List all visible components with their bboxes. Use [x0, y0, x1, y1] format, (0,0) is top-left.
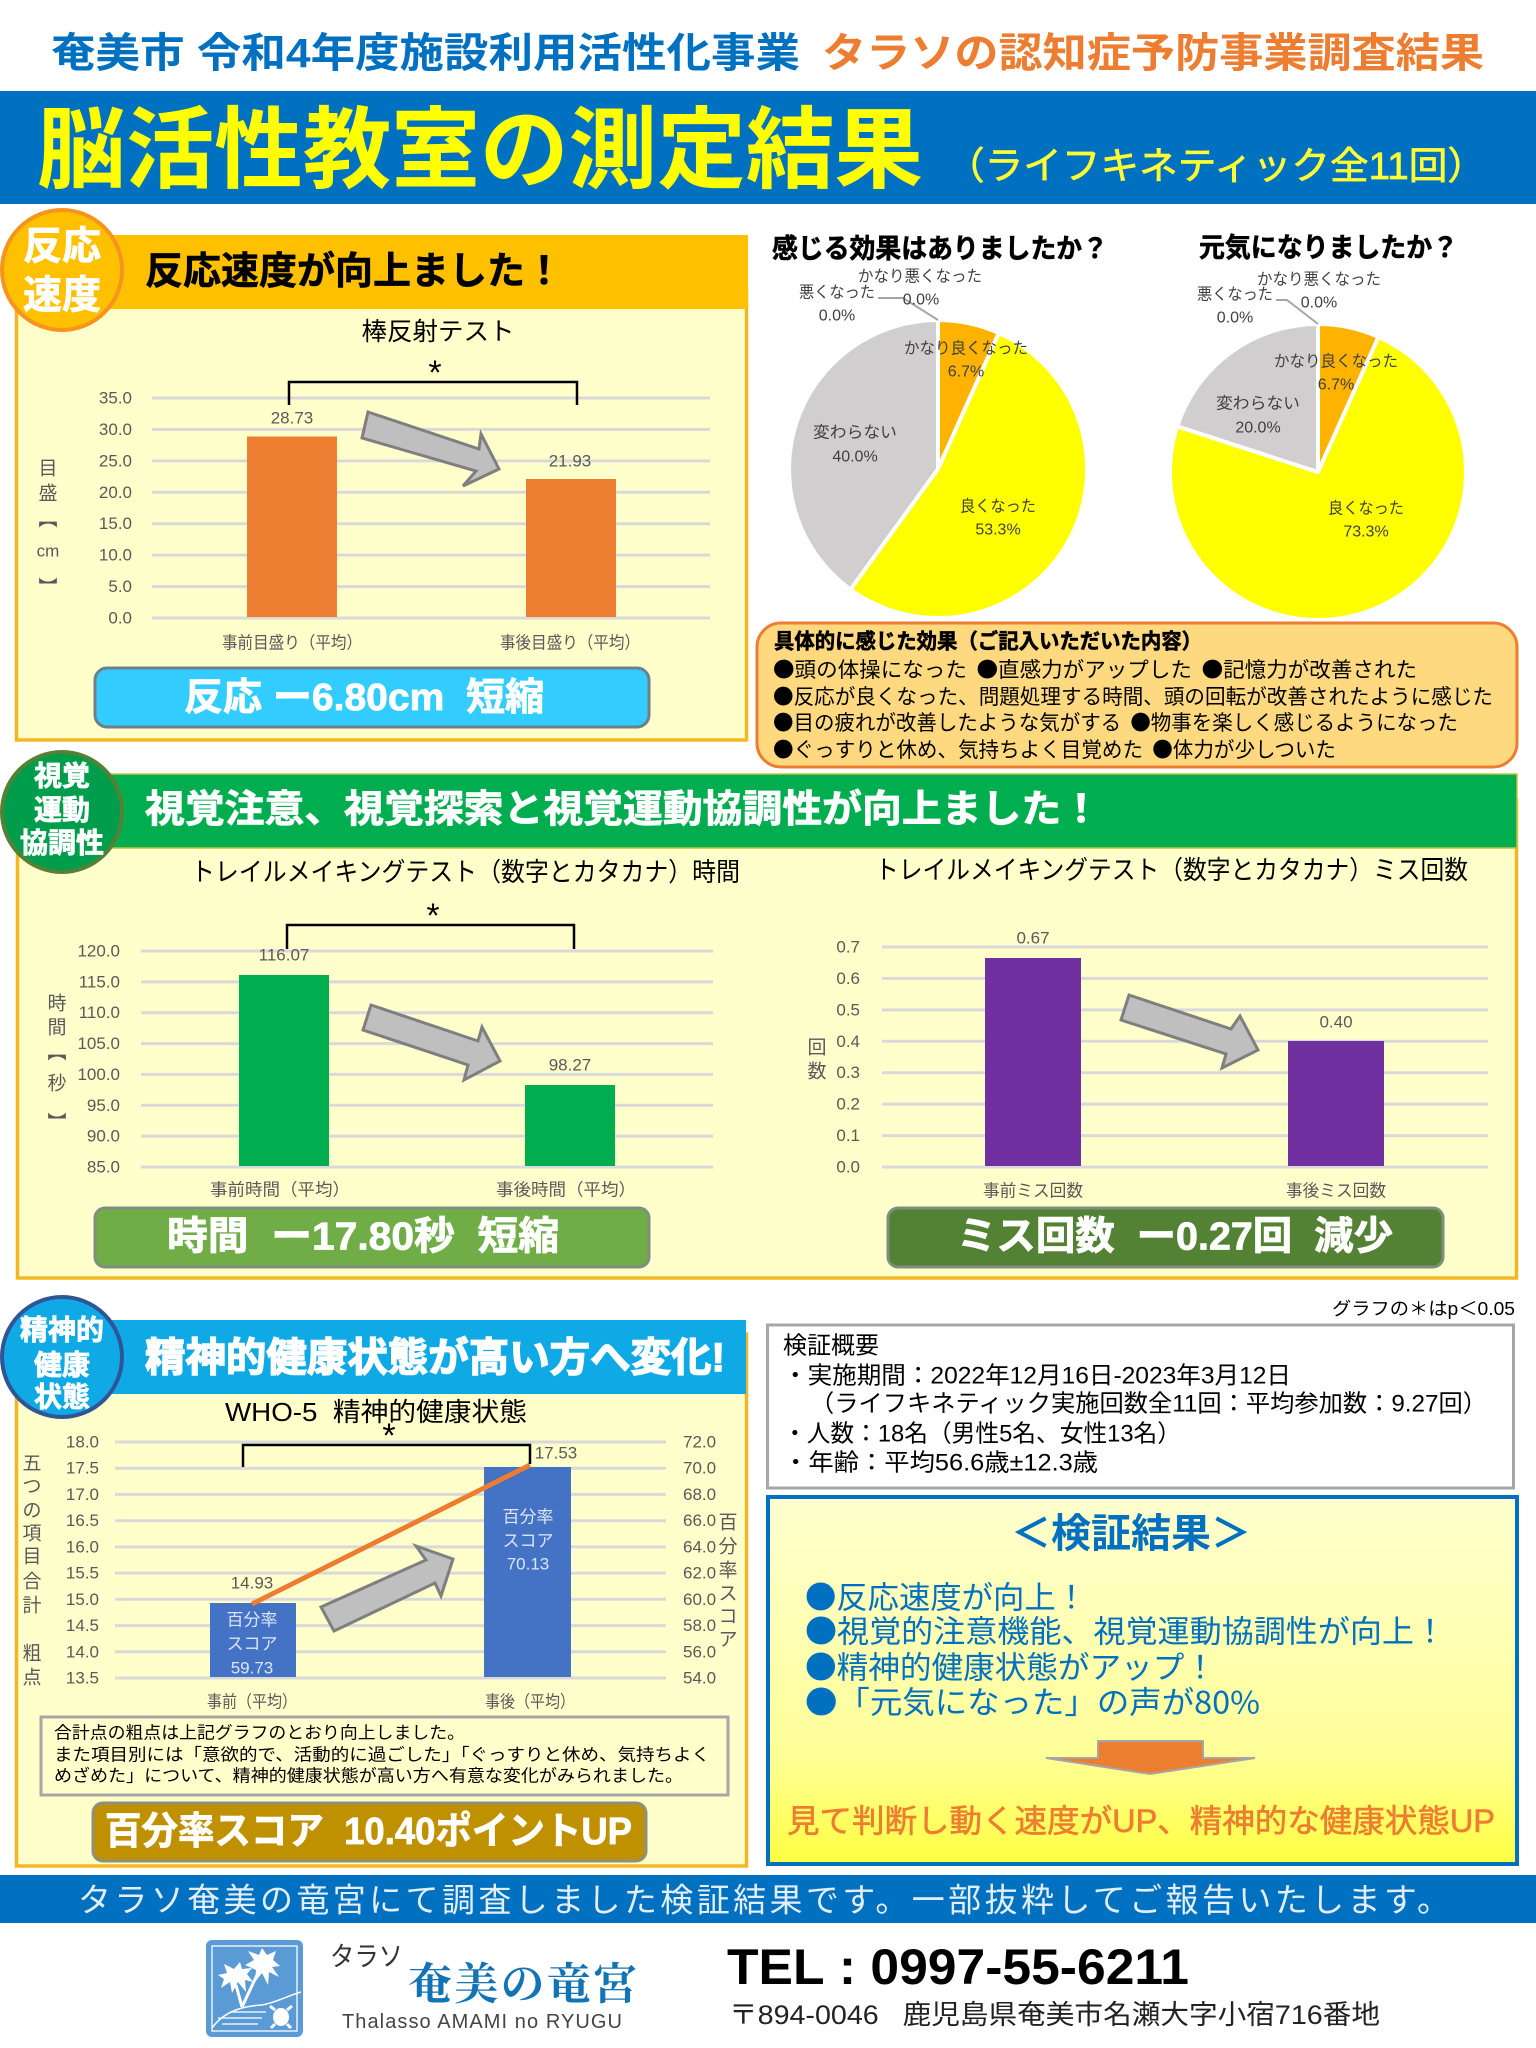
bar chart: stick reflex: 25.0: [99, 451, 132, 470]
bar chart: trail making errors: 0.3: [836, 1063, 860, 1082]
chart title: trail making time: トレイルメイキングテスト（数字とカタカナ）時間: [191, 857, 740, 887]
bar chart: stick reflex: 事後目盛り（平均）: [500, 634, 640, 652]
badge: visuomotor: [2, 752, 122, 872]
bar chart: trail making errors: 0.67: [1016, 928, 1050, 948]
conclusion text: 見て判断し動く速度がUP、精神的な健康状態UP: [787, 1803, 1495, 1839]
pie labels: energy: 0.0%: [1301, 294, 1337, 312]
combo chart: WHO-5: ア: [718, 1630, 738, 1650]
bar chart: stick reflex: 盛: [38, 482, 58, 504]
arrow: error decrease: [1121, 995, 1258, 1068]
combo chart: WHO-5: 15.0: [66, 1590, 99, 1609]
combo chart: WHO-5: 目: [22, 1546, 42, 1568]
pie labels: felt effect: 悪くなった: [799, 284, 875, 302]
badge: reaction speed: 速度: [23, 274, 101, 318]
pie chart: felt effect: [789, 320, 1087, 618]
combo chart: WHO-5: 13.5: [66, 1668, 99, 1688]
pie labels: energy: 0.0%: [1217, 310, 1253, 326]
pie labels: felt effect: 良くなった: [960, 498, 1036, 516]
combo chart: WHO-5: 66.0: [683, 1511, 716, 1530]
bar chart: trail making errors: [807, 928, 1488, 1200]
pie labels: felt effect: 0.0%: [819, 308, 855, 324]
bar chart: trail making time: 120.0: [77, 942, 120, 960]
combo chart: WHO-5: 百分率: [502, 1508, 554, 1526]
combo chart: WHO-5: 14.93: [231, 1574, 273, 1592]
pie labels: energy: 6.7%: [1318, 376, 1354, 394]
bar chart: stick reflex: 15.0: [99, 514, 132, 533]
bar chart: trail making time: ︻: [47, 1042, 67, 1064]
pie labels: felt effect: かなり悪くなった: [858, 268, 982, 286]
arrow: conclusion: [1046, 1741, 1255, 1774]
top heading: 奄美市 令和4年度施設利用活性化事業: [51, 30, 800, 76]
bar chart: trail making time: 98.27: [549, 1056, 591, 1074]
arrow: decrease: [362, 412, 499, 486]
panel: study overview: （ライフキネティック実施回数全11回：平均参加数：9.27回）: [810, 1390, 1487, 1418]
title banner: [0, 91, 1536, 204]
panel: study overview: [768, 1325, 1514, 1488]
combo chart: WHO-5: 五: [22, 1454, 42, 1474]
pie labels: energy: 20.0%: [1235, 420, 1281, 436]
combo chart: WHO-5: 16.5: [66, 1511, 99, 1530]
result list: ●「元気になった」の声が80%: [805, 1678, 1260, 1722]
pie labels: felt effect: [799, 268, 1036, 538]
combo chart: WHO-5: 56.0: [683, 1642, 716, 1661]
badge: visuomotor: 視覚: [34, 760, 90, 792]
bar chart: trail making time: 116.07: [259, 946, 309, 964]
panel: study overview: ・年齢：平均56.6歳±12.3歳: [783, 1450, 1098, 1476]
bar chart: trail making errors: 0.1: [836, 1126, 860, 1145]
bar chart: stick reflex: 目: [38, 458, 58, 480]
bar chart: stick reflex: cm: [37, 542, 59, 560]
callout: reaction result: 反応 ー6.80cm 短縮: [184, 677, 544, 719]
bar chart: stick reflex: 28.73: [271, 408, 313, 428]
combo chart: WHO-5: 15.5: [66, 1564, 99, 1583]
combo chart: WHO-5: 60.0: [683, 1590, 716, 1609]
bar chart: stick reflex: 事前目盛り（平均）: [222, 634, 362, 652]
bar chart: trail making errors: 事後ミス回数: [1286, 1182, 1386, 1200]
pie labels: energy: 73.3%: [1343, 524, 1389, 540]
panel: visuomotor coordination: [2, 752, 1517, 1278]
text block: WHO-5 explanation: 合計点の粗点は上記グラフのとおり向上しました。: [54, 1724, 465, 1742]
pie labels: felt effect: 6.7%: [948, 364, 984, 380]
bar chart: trail making errors: 0.4: [836, 1032, 860, 1051]
bar chart: stick reflex: ︻: [38, 510, 58, 530]
pie chart panel: energy: [1170, 233, 1466, 620]
combo chart: WHO-5: 計: [22, 1594, 42, 1616]
badge: mental health: 精神的: [20, 1314, 104, 1346]
text block: WHO-5 explanation: また項目別には「意欲的で、活動的に過ごした」「ぐっすりと休め、気持ちよく: [54, 1746, 710, 1764]
result list: [805, 1572, 1446, 1722]
logo wordmark: [330, 1942, 637, 2033]
bar chart: trail making errors: 0.7: [836, 938, 860, 956]
bar chart: trail making errors: 0.6: [836, 969, 860, 988]
combo chart: WHO-5: 項: [22, 1524, 42, 1544]
bar chart: stick reflex: ︼: [38, 576, 58, 598]
bar chart: trail making time: 事前時間（平均）: [210, 1180, 350, 1200]
combo chart: WHO-5: コ: [718, 1606, 738, 1628]
comment box: specific effects: ●目の疲れが改善したような気がする ●物事を楽しく感じるようになった: [773, 707, 1458, 737]
pie labels: felt effect: 40.0%: [832, 448, 878, 466]
combo chart: WHO-5: 14.0: [66, 1642, 99, 1661]
badge: visuomotor: 運動: [34, 794, 90, 826]
combo chart: WHO-5: 百分率: [226, 1610, 278, 1630]
bar chart: stick reflex: 35.0: [99, 388, 132, 408]
pie labels: felt effect: 0.0%: [903, 292, 939, 308]
badge: mental health: 状態: [34, 1382, 90, 1412]
logo icon: palm trees and turtle: [206, 1940, 303, 2037]
combo chart: WHO-5: 分: [718, 1536, 738, 1558]
comment box: specific effects: ●ぐっすりと休め、気持ちよく目覚めた ●体力が少しついた: [773, 734, 1336, 764]
chart title: stick reflex: 棒反射テスト: [362, 318, 514, 346]
bar chart: stick reflex: 0.0: [108, 608, 132, 628]
comment box: specific effects: ●頭の体操になった ●直感力がアップした ●記憶力が改善された: [773, 654, 1417, 684]
callout: reaction result: [95, 668, 649, 727]
bar chart: trail making time: 100.0: [77, 1065, 120, 1084]
result list: ●視覚的注意機能、視覚運動協調性が向上！: [805, 1606, 1446, 1652]
note: significance: グラフの＊はp＜0.05: [1332, 1299, 1515, 1319]
panel: mental health: [2, 1297, 746, 1866]
footer band: [0, 1875, 1536, 1923]
contact: phone and address: TEL : 0997-55-6211: [727, 1939, 1189, 1995]
comment box: specific effects: [757, 623, 1517, 767]
combo chart: WHO-5: 64.0: [683, 1537, 716, 1556]
bar chart: stick reflex: 21.93: [549, 452, 591, 470]
bar chart: trail making time: 110.0: [79, 1003, 120, 1022]
combo chart: WHO-5: 点: [22, 1666, 42, 1688]
bar chart: trail making errors: 0.5: [836, 1000, 860, 1019]
pie labels: felt effect: 変わらない: [813, 424, 897, 442]
bar chart: trail making errors: 数: [807, 1060, 827, 1082]
panel header: mental health: [100, 1320, 746, 1394]
heading: energy: 元気になりましたか？: [1199, 233, 1458, 263]
heading: mental health: 精神的健康状態が高い方へ変化!: [145, 1336, 725, 1380]
combo chart: WHO-5: 17.53: [535, 1444, 577, 1462]
comment box: specific effects: ●反応が良くなった、問題処理する時間、頭の回転が改善されたように感じた: [773, 681, 1493, 711]
pie labels: felt effect: 53.3%: [975, 522, 1021, 538]
combo chart: WHO-5: 58.0: [683, 1616, 716, 1635]
combo chart: WHO-5: ス: [718, 1584, 738, 1604]
heading: verification results: ＜検証結果＞: [1011, 1512, 1251, 1556]
top heading: タラソの認知症予防事業調査結果: [822, 30, 1484, 76]
pie labels: energy: 悪くなった: [1197, 286, 1273, 304]
combo chart: WHO-5: 70.13: [507, 1554, 549, 1574]
chart title: WHO-5: WHO-5 精神的健康状態: [225, 1397, 527, 1427]
callout: score result: 百分率スコア 10.40ポイントUP: [105, 1811, 632, 1853]
bar chart: trail making time: 115.0: [79, 972, 120, 991]
bar chart: stick reflex: 5.0: [108, 577, 132, 596]
bar chart: stick reflex: 20.0: [99, 483, 132, 502]
bar chart: trail making errors: 回: [807, 1038, 827, 1058]
logo wordmark: 奄美の竜宮: [408, 1948, 637, 2012]
combo chart: WHO-5: 72.0: [683, 1432, 716, 1452]
contact: phone and address: [727, 1939, 1380, 2030]
bar chart: trail making errors: 0.2: [836, 1095, 860, 1114]
combo chart: WHO-5: スコア: [226, 1634, 278, 1654]
pie labels: energy: かなり悪くなった: [1257, 270, 1381, 288]
combo chart: WHO-5: 59.73: [231, 1658, 273, 1678]
bar chart: stick reflex: 30.0: [99, 420, 132, 439]
combo chart: WHO-5: 62.0: [683, 1564, 716, 1583]
badge: reaction speed: [2, 210, 122, 330]
combo chart: WHO-5: 事後（平均）: [485, 1692, 575, 1712]
bar chart: stick reflex: [37, 354, 710, 652]
combo chart: WHO-5: 事前（平均）: [207, 1692, 297, 1712]
logo wordmark: Thalasso AMAMI no RYUGU: [342, 2011, 622, 2033]
combo chart: WHO-5: 54.0: [683, 1668, 716, 1688]
title banner: 脳活性教室の測定結果: [37, 100, 923, 200]
combo chart: WHO-5: スコア: [502, 1532, 554, 1550]
combo chart: WHO-5: つ: [22, 1476, 42, 1498]
combo chart: WHO-5: 粗: [22, 1642, 42, 1664]
arrow: score increase: [321, 1546, 453, 1631]
combo chart: WHO-5: 率: [718, 1560, 738, 1582]
badge: mental health: [2, 1297, 122, 1417]
pie labels: felt effect: かなり良くなった: [904, 340, 1028, 358]
text block: WHO-5 explanation: めざめた」について、精神的健康状態が高い方へ有意な変化がみられました。: [54, 1766, 683, 1786]
panel: study overview: ・実施期間：2022年12月16日-2023年3月12日: [783, 1362, 1291, 1390]
footer band: タラソ奄美の竜宮にて調査しました検証結果です。一部抜粋してご報告いたします。: [78, 1882, 1450, 1918]
bar chart: trail making time: [47, 897, 713, 1200]
combo chart: WHO-5: の: [22, 1500, 42, 1522]
pie labels: energy: かなり良くなった: [1274, 352, 1398, 370]
bar chart: trail making time: 時: [47, 992, 67, 1014]
text block: WHO-5 explanation: [41, 1717, 728, 1795]
bar chart: trail making time: 間: [47, 1018, 67, 1038]
bar chart: trail making errors: 事前ミス回数: [983, 1182, 1083, 1200]
result list: ●精神的健康状態がアップ！: [805, 1642, 1216, 1688]
combo chart: WHO-5: 17.5: [66, 1459, 99, 1478]
bar chart: stick reflex: 10.0: [99, 546, 132, 565]
bar chart: trail making time: 秒: [47, 1072, 67, 1094]
combo chart: WHO-5: 70.0: [683, 1459, 716, 1478]
heading: reaction speed: 反応速度が向上ました！: [145, 251, 563, 293]
panel: verification results: [768, 1497, 1517, 1864]
callout: time result: [95, 1208, 649, 1267]
combo chart: WHO-5: 17.0: [66, 1485, 99, 1504]
combo chart: WHO-5: 18.0: [66, 1432, 99, 1452]
pie chart panel: felt effect: [772, 234, 1108, 618]
combo chart: WHO-5: 16.0: [66, 1537, 99, 1556]
bar chart: trail making time: 90.0: [87, 1127, 120, 1146]
combo chart: WHO-5: 百: [718, 1512, 738, 1534]
callout: error result: ミス回数 ー0.27回 減少: [957, 1216, 1393, 1258]
bar chart: trail making time: 105.0: [77, 1034, 120, 1053]
combo chart: WHO-5: [22, 1417, 738, 1712]
heading: visuomotor: 視覚注意、視覚探索と視覚運動協調性が向上ました！: [145, 789, 1101, 831]
bar chart: trail making time: 95.0: [87, 1096, 120, 1115]
pie chart: energy: [1170, 324, 1466, 620]
bar chart: trail making time: 85.0: [87, 1158, 120, 1176]
result list: ●反応速度が向上！: [805, 1572, 1087, 1618]
pie labels: energy: 良くなった: [1328, 500, 1404, 518]
combo chart: WHO-5: 合: [22, 1570, 42, 1592]
bar chart: trail making time: ︼: [47, 1112, 67, 1134]
panel header: visuomotor: [100, 774, 1517, 848]
bar chart: trail making errors: 0.0: [836, 1158, 860, 1176]
arrow: time decrease: [363, 1005, 500, 1080]
badge: mental health: 健康: [34, 1350, 90, 1380]
contact: phone and address: 〒894-0046 鹿児島県奄美市名瀬大字小宿716番地: [729, 2000, 1380, 2030]
badge: reaction speed: 反応: [23, 226, 101, 268]
panel: study overview: ・人数：18名（男性5名、女性13名）: [783, 1420, 1181, 1448]
title banner: （ライフキネティック全11回）: [946, 146, 1486, 188]
panel: reaction speed: [2, 210, 748, 740]
panel header: reaction speed: [100, 235, 748, 309]
combo chart: WHO-5: 68.0: [683, 1485, 716, 1504]
chart title: trail making errors: トレイルメイキングテスト（数字とカタカナ）ミス回数: [875, 855, 1468, 885]
callout: time result: 時間 ー17.80秒 短縮: [167, 1216, 559, 1258]
pie labels: energy: 変わらない: [1216, 394, 1300, 412]
badge: visuomotor: 協調性: [20, 828, 104, 858]
bar chart: trail making time: *: [426, 897, 440, 935]
panel: study overview: 検証概要: [783, 1332, 879, 1360]
heading: felt effect: 感じる効果はありましたか？: [772, 234, 1108, 264]
comment box: specific effects: 具体的に感じた効果（ご記入いただいた内容）: [774, 630, 1202, 654]
bar chart: stick reflex: *: [428, 354, 442, 392]
pie labels: energy: [1197, 270, 1404, 540]
bar chart: trail making errors: 0.40: [1319, 1012, 1353, 1032]
combo chart: WHO-5: 14.5: [66, 1616, 99, 1635]
callout: error result: [888, 1208, 1443, 1267]
bar chart: trail making time: 事後時間（平均）: [496, 1180, 636, 1200]
combo chart: WHO-5: *: [382, 1417, 396, 1455]
top heading: [51, 30, 1484, 76]
logo wordmark: タラソ: [330, 1942, 403, 1972]
